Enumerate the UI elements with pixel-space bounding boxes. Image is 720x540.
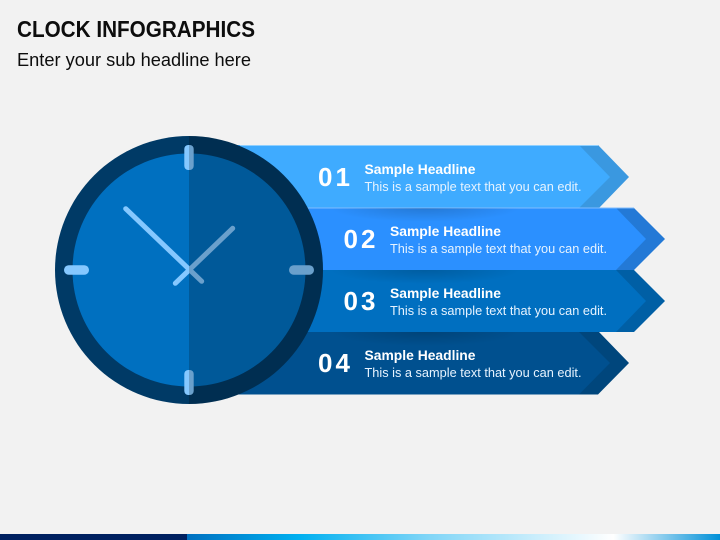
clock ticks [64, 145, 314, 395]
headline 02: Sample Headline [390, 223, 501, 239]
text 01: This is a sample text that you can edit. [364, 180, 582, 194]
headline 03: Sample Headline [390, 285, 501, 301]
icon: clock [55, 136, 323, 404]
headline 01: Sample Headline [364, 161, 476, 177]
panel: arrow 01 [230, 145, 629, 208]
text 03: This is a sample text that you can edit. [390, 304, 607, 318]
panel: arrow 02 [308, 208, 665, 270]
number 01: 01 [318, 162, 350, 192]
panel: arrow 04 [238, 332, 629, 394]
number 02: 02 [344, 224, 376, 254]
text 02: This is a sample text that you can edit. [390, 242, 607, 256]
panel: arrow 03 [308, 270, 665, 332]
footer band dark [0, 534, 187, 540]
number 04: 04 [318, 348, 351, 378]
right half shade [189, 136, 323, 404]
text 04: This is a sample text that you can edit. [364, 366, 582, 380]
footer band gradient [187, 534, 720, 540]
title: CLOCK INFOGRAPHICS [17, 16, 255, 42]
clock hands [126, 209, 233, 283]
subtitle: Enter your sub headline here [17, 50, 251, 70]
headline 04: Sample Headline [364, 347, 476, 363]
number 03: 03 [344, 286, 376, 316]
